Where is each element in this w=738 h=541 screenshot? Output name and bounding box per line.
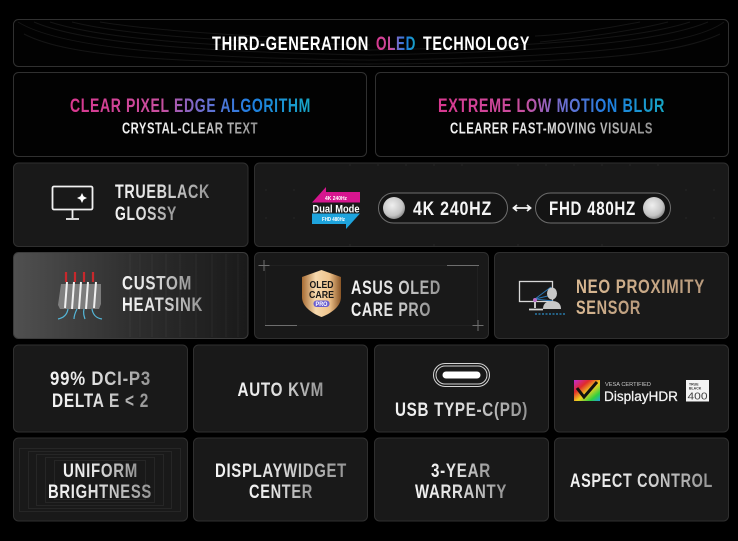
panel: uniform brightness: BRIGHTNESS	[48, 481, 152, 503]
icon: OLED care pro shield: CARE	[309, 289, 334, 301]
panel: uniform brightness	[14, 438, 188, 521]
pill: 4K 240Hz	[378, 193, 508, 223]
panel: ASUS OLED care pro: CARE PRO	[351, 299, 431, 321]
icon: OLED care pro shield: PRO	[316, 302, 328, 308]
pill: FHD 480Hz: FHD 480HZ	[549, 199, 636, 220]
panel: 3-year warranty: WARRANTY	[415, 481, 507, 503]
panel: clear pixel edge algorithm	[14, 72, 366, 156]
panel: ASUS OLED care pro	[254, 252, 488, 338]
icon: VESA DisplayHDR logo: BLACK	[689, 386, 702, 390]
panel: extreme low motion blur	[376, 72, 728, 156]
panel: extreme low motion blur: CLEARER FAST-MOVING VISUALS	[450, 120, 653, 138]
icon: OLED care pro shield	[302, 270, 341, 317]
title text: TECHNOLOGY	[423, 33, 530, 55]
panel: color accuracy: DELTA E < 2	[52, 390, 149, 412]
pill: 4K 240Hz: 4K 240HZ	[413, 199, 492, 220]
icon: dual mode badge	[312, 187, 360, 229]
icon: USB-C port	[434, 364, 490, 386]
panel: extreme low motion blur: EXTREME LOW MOTION BLUR	[438, 95, 665, 117]
pill: FHD 480Hz	[536, 193, 670, 223]
title text: THIRD-GENERATION	[212, 33, 369, 55]
panel: dual mode refresh rates	[254, 163, 728, 246]
arrow: double headed	[514, 205, 530, 211]
title text	[212, 33, 530, 55]
panel: 3-year warranty	[374, 438, 548, 521]
icon: VESA DisplayHDR logo	[574, 380, 709, 404]
panel: 3-year warranty: 3-YEAR	[431, 460, 491, 482]
panel: neo proximity sensor	[494, 252, 728, 338]
panel: color accuracy: 99% DCI-P3	[50, 368, 151, 390]
panel: custom heatsink: HEATSINK	[122, 294, 203, 316]
panel: custom heatsink	[14, 252, 248, 338]
panel: displaywidget center	[194, 438, 368, 521]
panel: DisplayHDR 400	[554, 345, 728, 432]
panel: title banner	[14, 20, 728, 66]
panel: displaywidget center: CENTER	[249, 481, 313, 503]
panel: trueblack glossy	[14, 163, 248, 246]
panel: uniform brightness: UNIFORM	[63, 460, 138, 482]
panel: auto KVM	[194, 345, 368, 432]
icon: VESA DisplayHDR logo: TRUE	[689, 382, 699, 386]
panel: USB type-C	[374, 345, 548, 432]
icon: VESA DisplayHDR logo: DisplayHDR	[604, 389, 678, 404]
icon: VESA DisplayHDR logo: 400	[688, 392, 708, 402]
icon: dual mode badge: Dual Mode	[312, 204, 360, 216]
icon: VESA DisplayHDR logo: VESA CERTIFIED	[605, 382, 651, 388]
panel: neo proximity sensor: NEO PROXIMITY	[576, 276, 705, 298]
panel: clear pixel edge algorithm: CRYSTAL-CLEAR TEXT	[122, 120, 258, 138]
icon: monitor with person sensor	[520, 282, 565, 314]
panel: USB type-C: USB TYPE-C(PD)	[395, 399, 528, 421]
icon: monitor with sparkle	[52, 186, 92, 219]
panel: color accuracy	[14, 345, 188, 432]
panel: neo proximity sensor: SENSOR	[576, 297, 641, 319]
panel: displaywidget center: DISPLAYWIDGET	[215, 460, 347, 482]
icon: dual mode badge: 4K 240Hz	[325, 196, 347, 202]
panel: trueblack glossy: GLOSSY	[115, 203, 177, 225]
panel: custom heatsink: CUSTOM	[122, 272, 192, 294]
icon: heatsink	[58, 272, 102, 319]
icon: OLED care pro shield: OLED	[310, 279, 334, 291]
panel: clear pixel edge algorithm: CLEAR PIXEL EDGE ALGORITHM	[70, 95, 311, 117]
title text: OLED	[376, 33, 416, 55]
panel: ASUS OLED care pro: ASUS OLED	[351, 277, 441, 299]
panel: aspect control	[554, 438, 728, 521]
icon: dual mode badge: FHD 480Hz	[322, 217, 345, 223]
panel: trueblack glossy: TRUEBLACK	[115, 181, 210, 203]
panel: auto KVM: AUTO KVM	[238, 379, 324, 401]
